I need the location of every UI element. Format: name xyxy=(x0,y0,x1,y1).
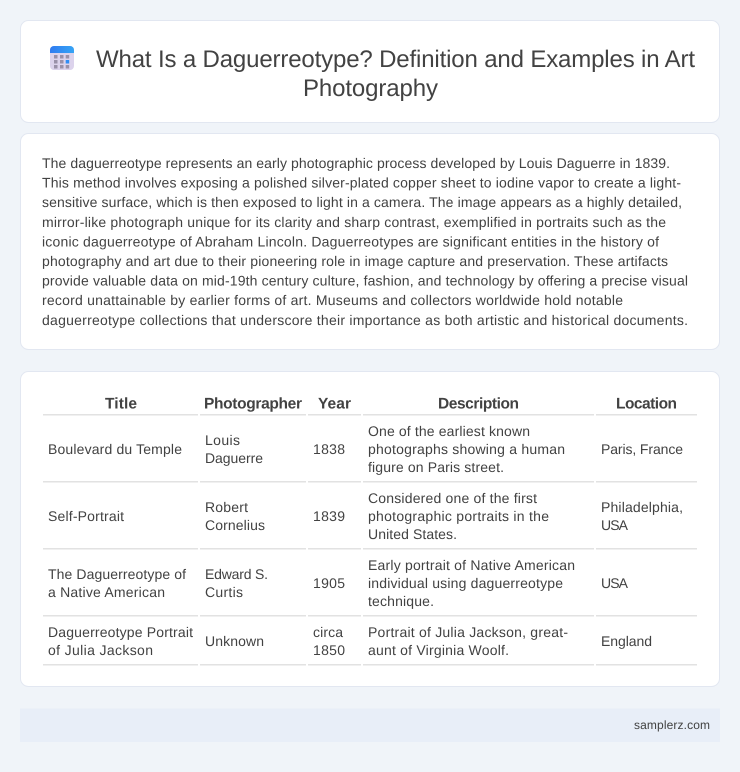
table header xyxy=(105,396,677,413)
table row: Native American: Edward S. xyxy=(205,566,268,582)
table row: Boulevard du Temple: Boulevard du Temple xyxy=(48,441,182,457)
table row: Self-Portrait: United States. xyxy=(368,526,457,542)
table row: Boulevard du Temple xyxy=(48,423,683,475)
table row: Native American: Early portrait of Native American xyxy=(368,557,575,573)
table row: Julia Jackson: of Julia Jackson xyxy=(48,642,153,658)
table header: Title xyxy=(105,396,137,413)
table row: Self-Portrait: Self-Portrait xyxy=(48,508,124,524)
title xyxy=(96,46,695,102)
table row: Boulevard du Temple: 1838 xyxy=(313,441,345,457)
table row: Boulevard du Temple: Daguerre xyxy=(205,450,263,466)
text block: description: sensitive surface, which is then exposed to light in a camera. The image appears as a highly detailed, xyxy=(42,194,682,210)
table row: Julia Jackson: circa xyxy=(313,624,343,640)
table row: Native American: 1905 xyxy=(313,575,345,591)
text block: description: mirror-like photograph unique for its clarity and sharp contrast, exemplified in portraits such as the xyxy=(42,214,666,230)
table row: Native American: The Daguerreotype of xyxy=(48,566,186,582)
table row: Boulevard du Temple: Louis xyxy=(205,432,240,448)
table row: Self-Portrait xyxy=(48,490,683,542)
table row: Self-Portrait: Cornelius xyxy=(205,517,265,533)
table row: Julia Jackson: Unknown xyxy=(205,633,264,649)
table row: Julia Jackson: Portrait of Julia Jackson, great- xyxy=(368,624,568,640)
panel: description xyxy=(20,134,720,350)
table row: Boulevard du Temple: One of the earliest known xyxy=(368,423,530,439)
table row: Self-Portrait: Robert xyxy=(205,499,248,515)
panel: title card xyxy=(20,20,720,122)
table row: Self-Portrait: photographic portraits in the xyxy=(368,508,549,524)
table row: Boulevard du Temple: figure on Paris street. xyxy=(368,459,504,475)
footer xyxy=(20,708,720,742)
table row: Boulevard du Temple: photographs showing a human xyxy=(368,441,565,457)
table row: Native American: a Native American xyxy=(48,584,165,600)
title: Photography xyxy=(303,75,438,102)
table row: Boulevard du Temple: Paris, France xyxy=(601,441,683,457)
table row: Self-Portrait: 1839 xyxy=(313,508,345,524)
text block: description: daguerreotype collections that underscore their importance as both artistic and historical documents. xyxy=(42,312,688,328)
table row: Native American: technique. xyxy=(368,593,434,609)
panel: table xyxy=(20,372,720,686)
table row: Native American xyxy=(48,557,629,609)
table row: Julia Jackson xyxy=(48,624,652,658)
table row: Native American: individual using daguerreotype xyxy=(368,575,563,591)
table row: Julia Jackson: Daguerreotype Portrait xyxy=(48,624,193,640)
text block: description: record unattainable by earlier forms of art. Museums and collectors worldwide hold notable xyxy=(42,292,623,308)
table row: Julia Jackson: 1850 xyxy=(313,642,345,658)
table header: Description xyxy=(438,396,519,413)
table row: Self-Portrait: Considered one of the first xyxy=(368,490,537,506)
footer: samplerz.com xyxy=(634,718,710,732)
table row: Julia Jackson: England xyxy=(601,633,652,649)
table row: Self-Portrait: Philadelphia, xyxy=(601,499,683,515)
table row: Native American: Curtis xyxy=(205,584,243,600)
table header: Year xyxy=(318,396,351,413)
text block: description: provide valuable data on mid-19th century culture, fashion, and technology by offering a precise visual xyxy=(42,273,688,289)
text block: description: iconic daguerreotype of Abraham Lincoln. Daguerreotypes are significant entities in the history of xyxy=(42,233,659,249)
table header: Photographer xyxy=(204,396,302,413)
text block: description: This method involves exposing a polished silver-plated copper sheet to iodine vapor to create a light- xyxy=(42,175,681,191)
icon: calendar xyxy=(50,46,74,70)
table header: Location xyxy=(616,396,677,413)
text block: description xyxy=(42,155,688,328)
table row: Julia Jackson: aunt of Virginia Woolf. xyxy=(368,642,509,658)
table row: Self-Portrait: USA xyxy=(601,517,629,533)
table row: Native American: USA xyxy=(601,575,629,591)
text block: description: The daguerreotype represents an early photographic process developed by Louis Daguerre in 1839. xyxy=(42,155,670,171)
text block: description: photography and art due to their pioneering role in image capture and preservation. These artifacts xyxy=(42,253,668,269)
title: What Is a Daguerreotype? Definition and Examples in Art xyxy=(96,46,695,73)
